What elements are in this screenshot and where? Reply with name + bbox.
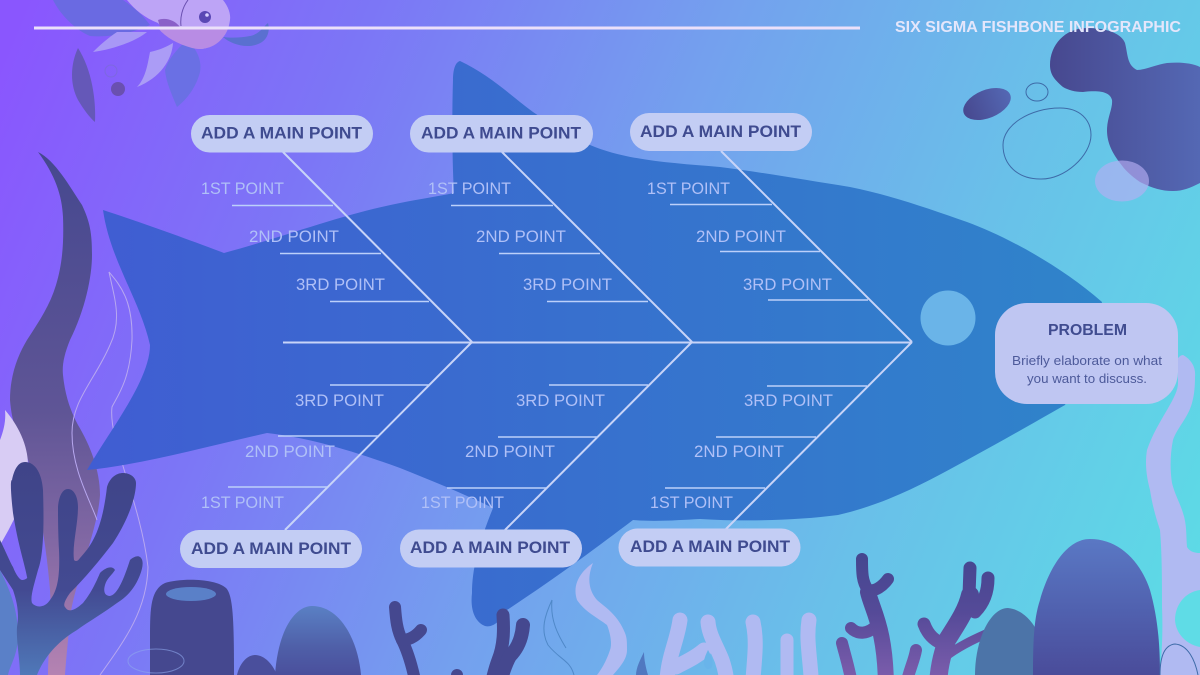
main point pill: top 2 <box>410 115 593 152</box>
bottom branch 2: 3RD POINT <box>516 391 605 410</box>
main point pill: bottom 1: ADD A MAIN POINT <box>191 539 352 558</box>
illustration: bottom center coral <box>395 607 523 675</box>
main point pill: bottom 2: ADD A MAIN POINT <box>410 538 571 557</box>
top branch 1: 2ND POINT <box>249 227 339 246</box>
illustration: small dark spike <box>636 652 648 675</box>
illustration: pale seaweed outline <box>72 272 148 675</box>
main point pill: top 2: ADD A MAIN POINT <box>421 124 582 142</box>
illustration: goldfish <box>53 0 269 122</box>
top branch 3: 2ND POINT <box>696 227 786 246</box>
illustration: round rocks <box>237 606 361 675</box>
main point pill: top 3: ADD A MAIN POINT <box>640 122 802 141</box>
illustration: left branching coral <box>0 462 143 675</box>
bottom branch 3: 2ND POINT <box>694 442 784 461</box>
bottom branch 2 <box>421 342 692 530</box>
illustration: right seaweed <box>1146 355 1200 675</box>
main point pill: top 1: ADD A MAIN POINT <box>201 124 363 142</box>
bottom branch 1: 2ND POINT <box>245 442 335 461</box>
top branch 1: 1ST POINT <box>201 179 284 198</box>
title: SIX SIGMA FISHBONE INFOGRAPHIC <box>895 19 1181 36</box>
main point pill: bottom 1 <box>180 530 362 568</box>
bottom branch 2: 2ND POINT <box>465 442 555 461</box>
top branch 3: 3RD POINT <box>743 275 832 294</box>
bottom branch 3: 1ST POINT <box>650 493 733 512</box>
main point pill: bottom 2 <box>400 530 582 568</box>
bottom branch 1 <box>201 342 472 530</box>
problem callout <box>995 303 1178 404</box>
top branch 3: 1ST POINT <box>647 179 730 198</box>
illustration: pale bottom seaweed <box>575 563 812 675</box>
illustration: left edge seaweed <box>0 570 18 675</box>
top branch 2: 1ST POINT <box>428 179 511 198</box>
illustration: barrel sponge <box>128 580 234 675</box>
bottom branch 2: 1ST POINT <box>421 493 504 512</box>
fishbone spine <box>283 342 912 344</box>
problem callout: PROBLEM <box>1048 322 1127 339</box>
top branch 2 <box>428 152 692 342</box>
main point pill: bottom 3 <box>618 528 800 566</box>
bottom branch 1: 1ST POINT <box>201 493 284 512</box>
main point pill: top 3 <box>630 113 812 151</box>
problem callout: you want to discuss. <box>1027 371 1147 386</box>
illustration: right rocks <box>975 539 1198 675</box>
illustration: top right blobs <box>959 28 1200 202</box>
illustration: pale left frond <box>0 410 28 545</box>
top branch 3 <box>647 151 912 342</box>
bottom branch 3: 3RD POINT <box>744 391 833 410</box>
bottom branch 1: 3RD POINT <box>295 391 384 410</box>
fish silhouette <box>87 61 1102 626</box>
illustration: left kelp <box>10 152 100 675</box>
top branch 1: 3RD POINT <box>296 275 385 294</box>
main point pill: bottom 3: ADD A MAIN POINT <box>630 537 791 556</box>
problem callout: Briefly elaborate on what <box>1012 353 1162 368</box>
top branch 2: 2ND POINT <box>476 227 566 246</box>
top branch 1 <box>201 152 472 342</box>
fish eye <box>920 290 976 346</box>
bottom branch 3 <box>650 342 912 529</box>
main point pill: top 1 <box>191 115 373 152</box>
illustration: right purple corals <box>842 559 1000 675</box>
illustration: thin seaweed outline <box>544 600 574 675</box>
top rule <box>34 26 860 30</box>
top branch 2: 3RD POINT <box>523 275 612 294</box>
